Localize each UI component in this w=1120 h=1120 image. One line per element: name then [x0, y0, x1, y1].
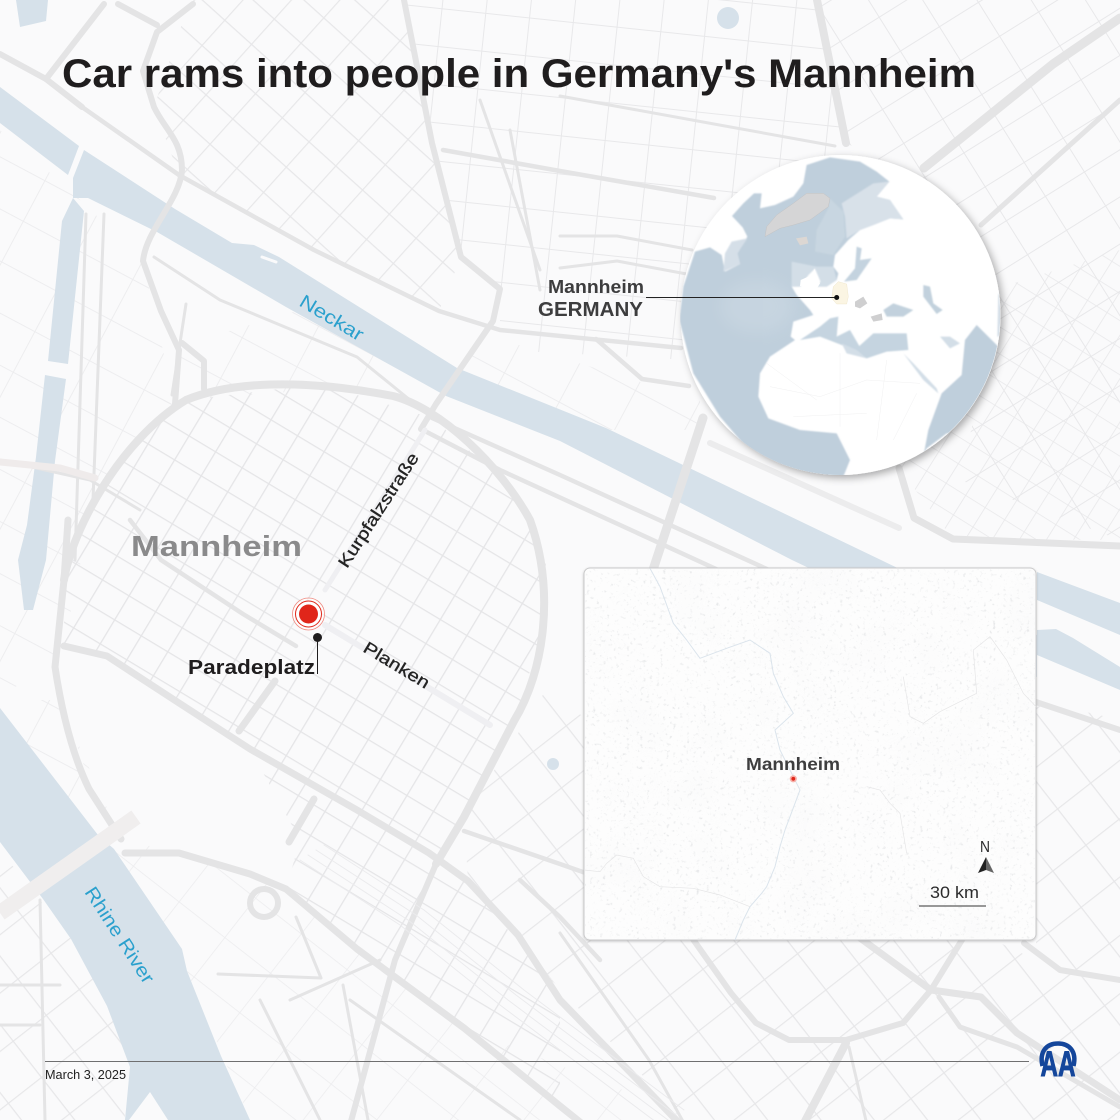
footer rule: [45, 1060, 1029, 1062]
callout: Mannheim Germany on globe: Mannheim: [548, 277, 644, 297]
river: Neckar: [0, 0, 1120, 770]
city label: Mannheim: Mannheim: [131, 531, 302, 563]
callout: Mannheim Germany on globe: GERMANY: [538, 299, 644, 321]
Kurpfalzstrasse pedestrian street: [325, 430, 425, 590]
inset: north arrow: [978, 839, 994, 873]
globe: Iceland: [796, 237, 808, 245]
inset: Mannheim label: Mannheim: [746, 754, 840, 774]
incident marker: [292, 598, 324, 630]
rail yard tracks: [300, 845, 684, 1120]
river label: Rhine River: Rhine River: [80, 883, 158, 988]
river: Rhine: [0, 708, 250, 1120]
globe: Hungary and Romania highlights: [855, 297, 883, 322]
panel: inset locator map: [584, 568, 1036, 940]
logo: AA: [1040, 1044, 1076, 1084]
street label: Kurpfalzstraße: Kurpfalzstraße: [334, 449, 423, 571]
Rhine bridge: [0, 817, 136, 913]
globe: British Isles: [800, 268, 820, 287]
inset: scale bar: 30 km: [930, 884, 979, 902]
globe: [679, 155, 1003, 477]
inset: settlement speckle: [585, 569, 1035, 939]
callout: Paradeplatz: [188, 633, 322, 679]
Neckar jetty: [262, 257, 276, 262]
globe: mid-Atlantic sheen: [720, 280, 793, 333]
street label: Planken: Planken: [360, 638, 433, 693]
inset: scale bar: [919, 884, 986, 906]
inset: north arrow: N: [980, 839, 990, 856]
globe: Germany: [832, 282, 848, 304]
southern arteries: [856, 935, 1120, 1100]
Planken pedestrian street: [325, 625, 490, 725]
harbour bridge rail: [0, 462, 95, 478]
title: Car rams into people in Germany's Mannheim: [62, 52, 976, 96]
northern arteries: [0, 0, 500, 1120]
date: March 3, 2025: [45, 1068, 126, 1082]
callout: Paradeplatz: Paradeplatz: [188, 657, 315, 679]
ring road: [64, 384, 544, 864]
logo: AA: AA: [1040, 1045, 1076, 1084]
western and southern arteries: [55, 520, 681, 1120]
inset: rivers: [584, 568, 1036, 940]
globe: Greenland: [765, 193, 830, 237]
globe: Africa borders: [767, 353, 920, 440]
inset: location dot: [790, 775, 797, 782]
globe: oceans: [679, 157, 1003, 477]
callout: Mannheim Germany on globe: [538, 277, 839, 321]
eastern arteries: [817, 0, 846, 143]
river label: Neckar: Neckar: [295, 291, 368, 346]
